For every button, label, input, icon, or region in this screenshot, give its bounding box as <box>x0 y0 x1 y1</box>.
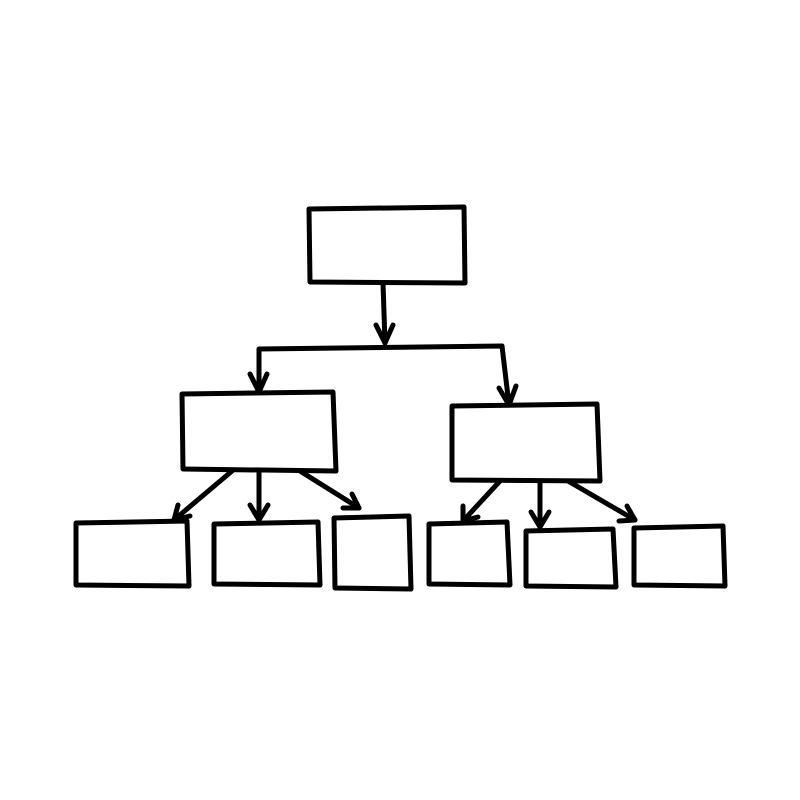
right middle box <box>452 404 600 481</box>
top box <box>309 207 465 283</box>
left middle box <box>182 392 336 471</box>
bottom box 6 <box>634 526 725 586</box>
bottom box 4 <box>429 522 510 585</box>
bottom box 2 <box>214 522 320 585</box>
branch connector <box>250 346 516 405</box>
arrows from left middle box <box>174 471 359 520</box>
arrows from right middle box <box>463 481 635 527</box>
bottom box 5 <box>526 529 616 587</box>
bottom box 1 <box>76 521 189 586</box>
bottom box 3 <box>334 516 411 589</box>
arrow: top to branch <box>376 283 393 343</box>
